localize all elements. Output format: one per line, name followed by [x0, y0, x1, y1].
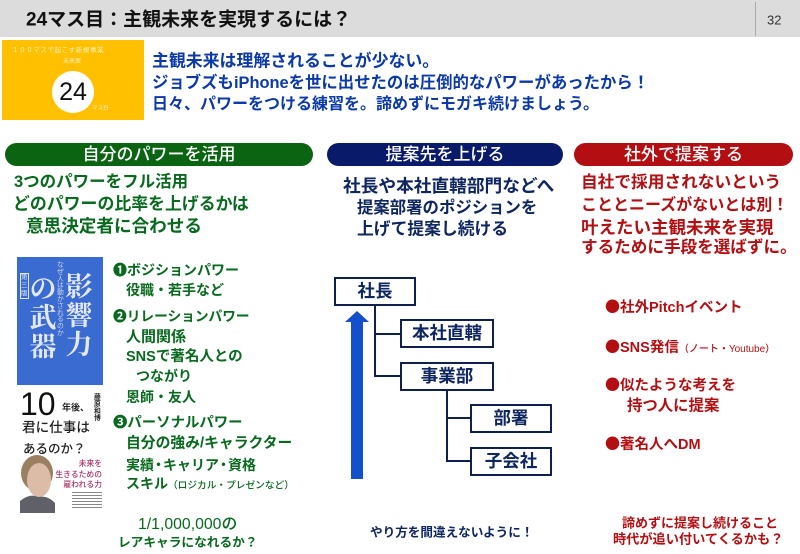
bullet: pitch events: ●社外Pitchイベント	[605, 296, 742, 317]
heading pill: red	[574, 143, 793, 166]
author: 藤原和博	[94, 394, 101, 422]
green closing text: レアキャラになれるか？	[118, 536, 258, 550]
red lead text: 自社で採用されないという	[581, 173, 781, 192]
divider	[755, 2, 756, 36]
card footer: マス目	[92, 105, 109, 111]
personal power: 自分の強み/キャラクター	[126, 436, 292, 452]
red bullet list	[605, 296, 775, 454]
title part: 年後、	[62, 402, 89, 412]
box: department	[470, 404, 552, 433]
book title column 1: 影響力	[66, 272, 92, 360]
green closing text: 1/1,000,000の	[138, 516, 237, 533]
box: division: 事業部	[421, 366, 473, 386]
intro text: 日々、パワーをつける練習を。諦めずにモガキ続けましょう。	[152, 96, 599, 113]
box: subsidiary	[470, 447, 552, 476]
relation power: 恩師・友人	[126, 389, 196, 405]
box: president: 社長	[358, 281, 392, 301]
heading pill: navy	[327, 143, 563, 166]
green lead text	[13, 172, 249, 236]
red lead text	[581, 173, 797, 257]
red bullet list: 持つ人に提案	[627, 397, 719, 414]
heading pill: red: 社外で提案する	[624, 145, 743, 164]
position power	[113, 262, 239, 298]
blurb	[72, 492, 102, 510]
relation power: 人間関係	[126, 328, 186, 346]
title line 2: 君に仕事は	[22, 420, 90, 435]
title: 24マス目：主観未来を実現するには？	[26, 10, 351, 30]
intro text: 主観未来は理解されることが少ない。	[152, 52, 439, 71]
relation power: ❷リレーションパワー	[113, 309, 250, 324]
relation power: つながり	[136, 368, 192, 384]
book title column 2: の武器	[30, 274, 56, 362]
green lead text: 意思決定者に合わせる	[26, 216, 202, 236]
red lead text: 叶えたい主観未来を実現	[581, 217, 774, 237]
navy lead text: 社長や本社直轄部門などへ	[343, 176, 554, 196]
box: president	[334, 277, 416, 306]
navy lead text: 上げて提案し続ける	[357, 220, 508, 239]
box: HQ direct: 本社直轄	[412, 323, 482, 343]
relation power	[113, 309, 250, 405]
box: department: 部署	[494, 408, 528, 428]
header bar	[0, 0, 800, 37]
list: power types	[113, 262, 294, 492]
position power: ❶ボジションパワー	[113, 262, 239, 278]
org chart	[334, 277, 552, 476]
green lead text: 3つのパワーをフル活用	[14, 173, 188, 191]
tagline: 雇われる力	[63, 480, 102, 489]
intro text	[152, 52, 649, 113]
personal power	[113, 414, 294, 492]
red lead text: こととニーズがないとは別！	[581, 197, 788, 214]
green lead text: どのパワーの比率を上げるかは	[13, 195, 249, 214]
card subtitle: 未来案	[63, 59, 81, 65]
green closing text	[118, 516, 258, 550]
heading pill: green	[5, 143, 313, 166]
book edition	[20, 273, 29, 299]
card caption: １００マスで起こす新規事業	[12, 47, 104, 54]
navy lead text: 提案部署のポジションを	[357, 199, 537, 217]
red closing text: 諦めずに提案し続けること	[622, 516, 778, 530]
child photo	[20, 455, 55, 513]
title line 3: あるのか？	[23, 442, 86, 456]
white circle with 24: 24	[59, 78, 87, 106]
heading pill: navy: 提案先を上げる	[386, 145, 504, 164]
connector lines	[374, 304, 376, 377]
intro text: ジョブズもiPhoneを世に出せたのは圧倒的なパワーがあったから！	[152, 74, 649, 92]
tagline: 生きるための	[55, 470, 102, 478]
navy closing text: やり方を間違えないように！	[370, 526, 533, 540]
box: subsidiary: 子会社	[485, 451, 537, 471]
white circle with 24	[52, 71, 94, 113]
book edition: 第三版	[21, 274, 28, 297]
personal power: ❸パーソナルパワー	[113, 415, 243, 431]
position power: 役職・若手など	[126, 282, 224, 298]
red closing text: 時代が追い付いてくるかも？	[613, 531, 783, 546]
heading pill: green: 自分のパワーを活用	[82, 145, 236, 164]
page number: 32	[767, 12, 781, 28]
red closing text	[613, 516, 783, 546]
personal power: 実績・キャリア・資格	[126, 457, 256, 473]
tagline: 未来を	[79, 459, 102, 468]
bullet: SNS: ●SNS発信（ノート・Youtube）	[605, 336, 775, 357]
red lead text: するために手段を選ばずに。	[581, 238, 797, 257]
navy lead text	[343, 176, 554, 239]
book cover: ten years later	[17, 390, 104, 513]
box: division	[400, 362, 494, 391]
thumbnail: yellow card with number 24	[2, 40, 144, 120]
box: HQ direct	[400, 319, 494, 348]
arrow: upward	[345, 311, 369, 479]
relation power: SNSで著名人との	[126, 349, 243, 365]
bullet: similar thinkers: ●似たような考えを	[605, 374, 736, 395]
bullet: DM: ●著名人へDM	[605, 433, 701, 454]
book subtitle: なぜ人は動かされるのか	[57, 262, 64, 337]
book cover: influence	[17, 257, 103, 385]
tagline	[55, 459, 102, 489]
personal power: スキル（ロジカル・プレゼンなど）	[126, 476, 294, 492]
